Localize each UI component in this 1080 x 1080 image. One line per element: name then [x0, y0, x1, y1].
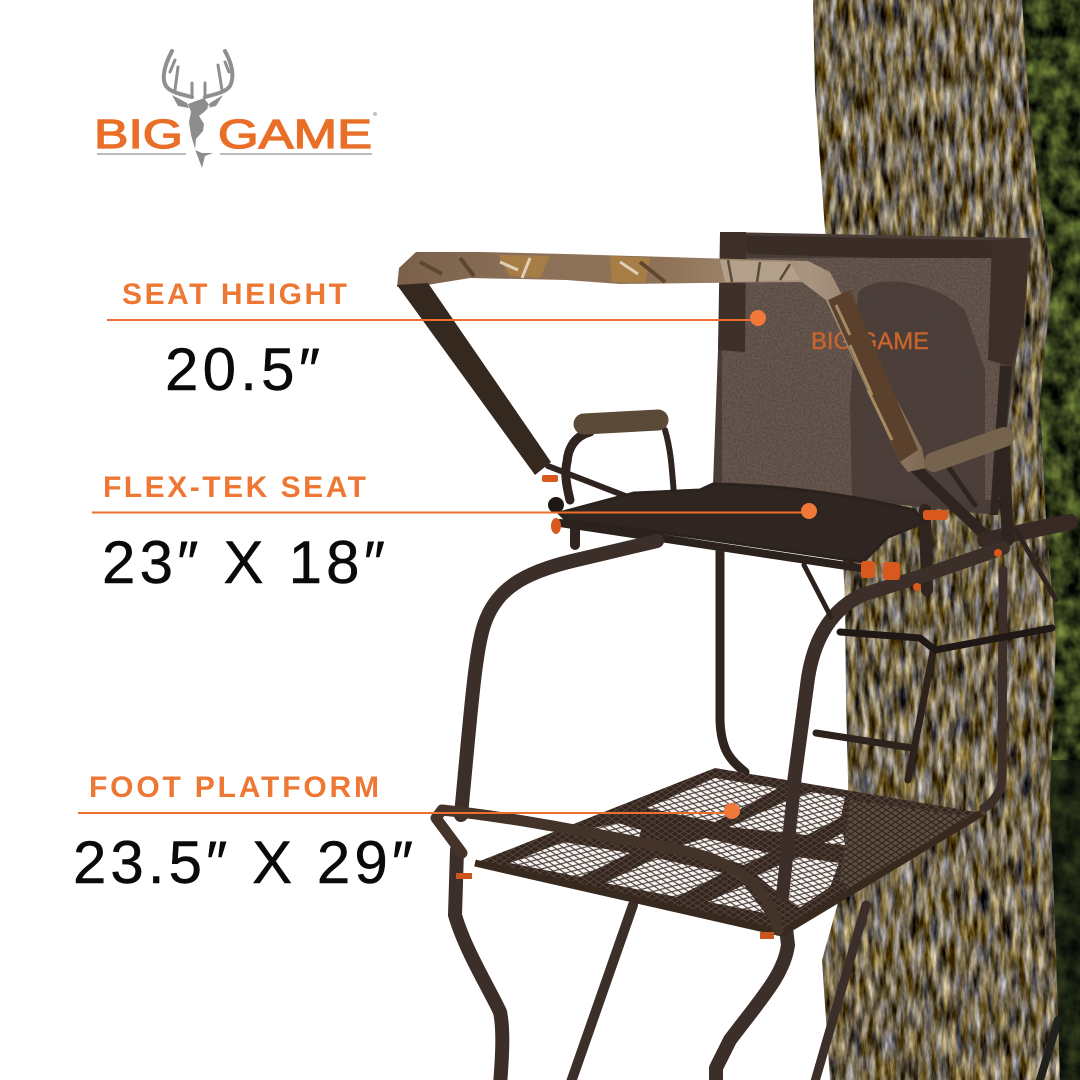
logo wordmark [94, 111, 372, 157]
top camo arm rest [397, 252, 926, 472]
front rail [436, 810, 778, 930]
right arm grip [934, 437, 1004, 462]
logo antlers [164, 51, 232, 97]
flex-tek seat dot [801, 503, 817, 519]
seat rails [548, 430, 1070, 600]
logo underline [97, 153, 372, 155]
seat height dot [750, 310, 766, 326]
seat front rails [560, 523, 860, 568]
logo wordmark: GAME [218, 111, 372, 157]
callout: foot platform [73, 771, 740, 896]
seat height label: SEAT HEIGHT [122, 278, 347, 311]
right upright over platform [782, 780, 795, 900]
callout: seat height [107, 278, 766, 403]
foot platform label: FOOT PLATFORM [89, 771, 379, 804]
side strap [397, 283, 551, 475]
flex-tek seat label: FLEX-TEK SEAT [103, 471, 366, 504]
seat surface [559, 484, 925, 562]
logo deer head [172, 95, 223, 168]
left arm grip [584, 420, 658, 424]
tree trunk [813, 0, 1060, 1080]
foot platform [475, 768, 982, 933]
foot platform value: 23.5″ X 29″ [73, 829, 413, 896]
seat height leader line [107, 319, 758, 321]
frame: hoops and legs [455, 541, 1058, 1080]
flex-tek seat leader line [92, 512, 809, 514]
logo wordmark: BIG [94, 111, 183, 157]
orange bolts [456, 475, 1002, 939]
seat knob [548, 497, 564, 513]
seat back mesh [713, 232, 1030, 515]
logo: Big Game [94, 51, 377, 168]
seat back logo text: BIG GAME [811, 328, 929, 355]
foot platform dot [724, 803, 740, 819]
seat height value: 20.5″ [165, 336, 320, 403]
callout: flex-tek seat [92, 471, 817, 596]
foliage background [1015, 0, 1080, 1080]
foot platform leader line [78, 812, 732, 814]
product: tree stand [397, 232, 1070, 1080]
flex-tek seat value: 23″ X 18″ [102, 529, 385, 596]
logo registered mark [373, 112, 377, 116]
